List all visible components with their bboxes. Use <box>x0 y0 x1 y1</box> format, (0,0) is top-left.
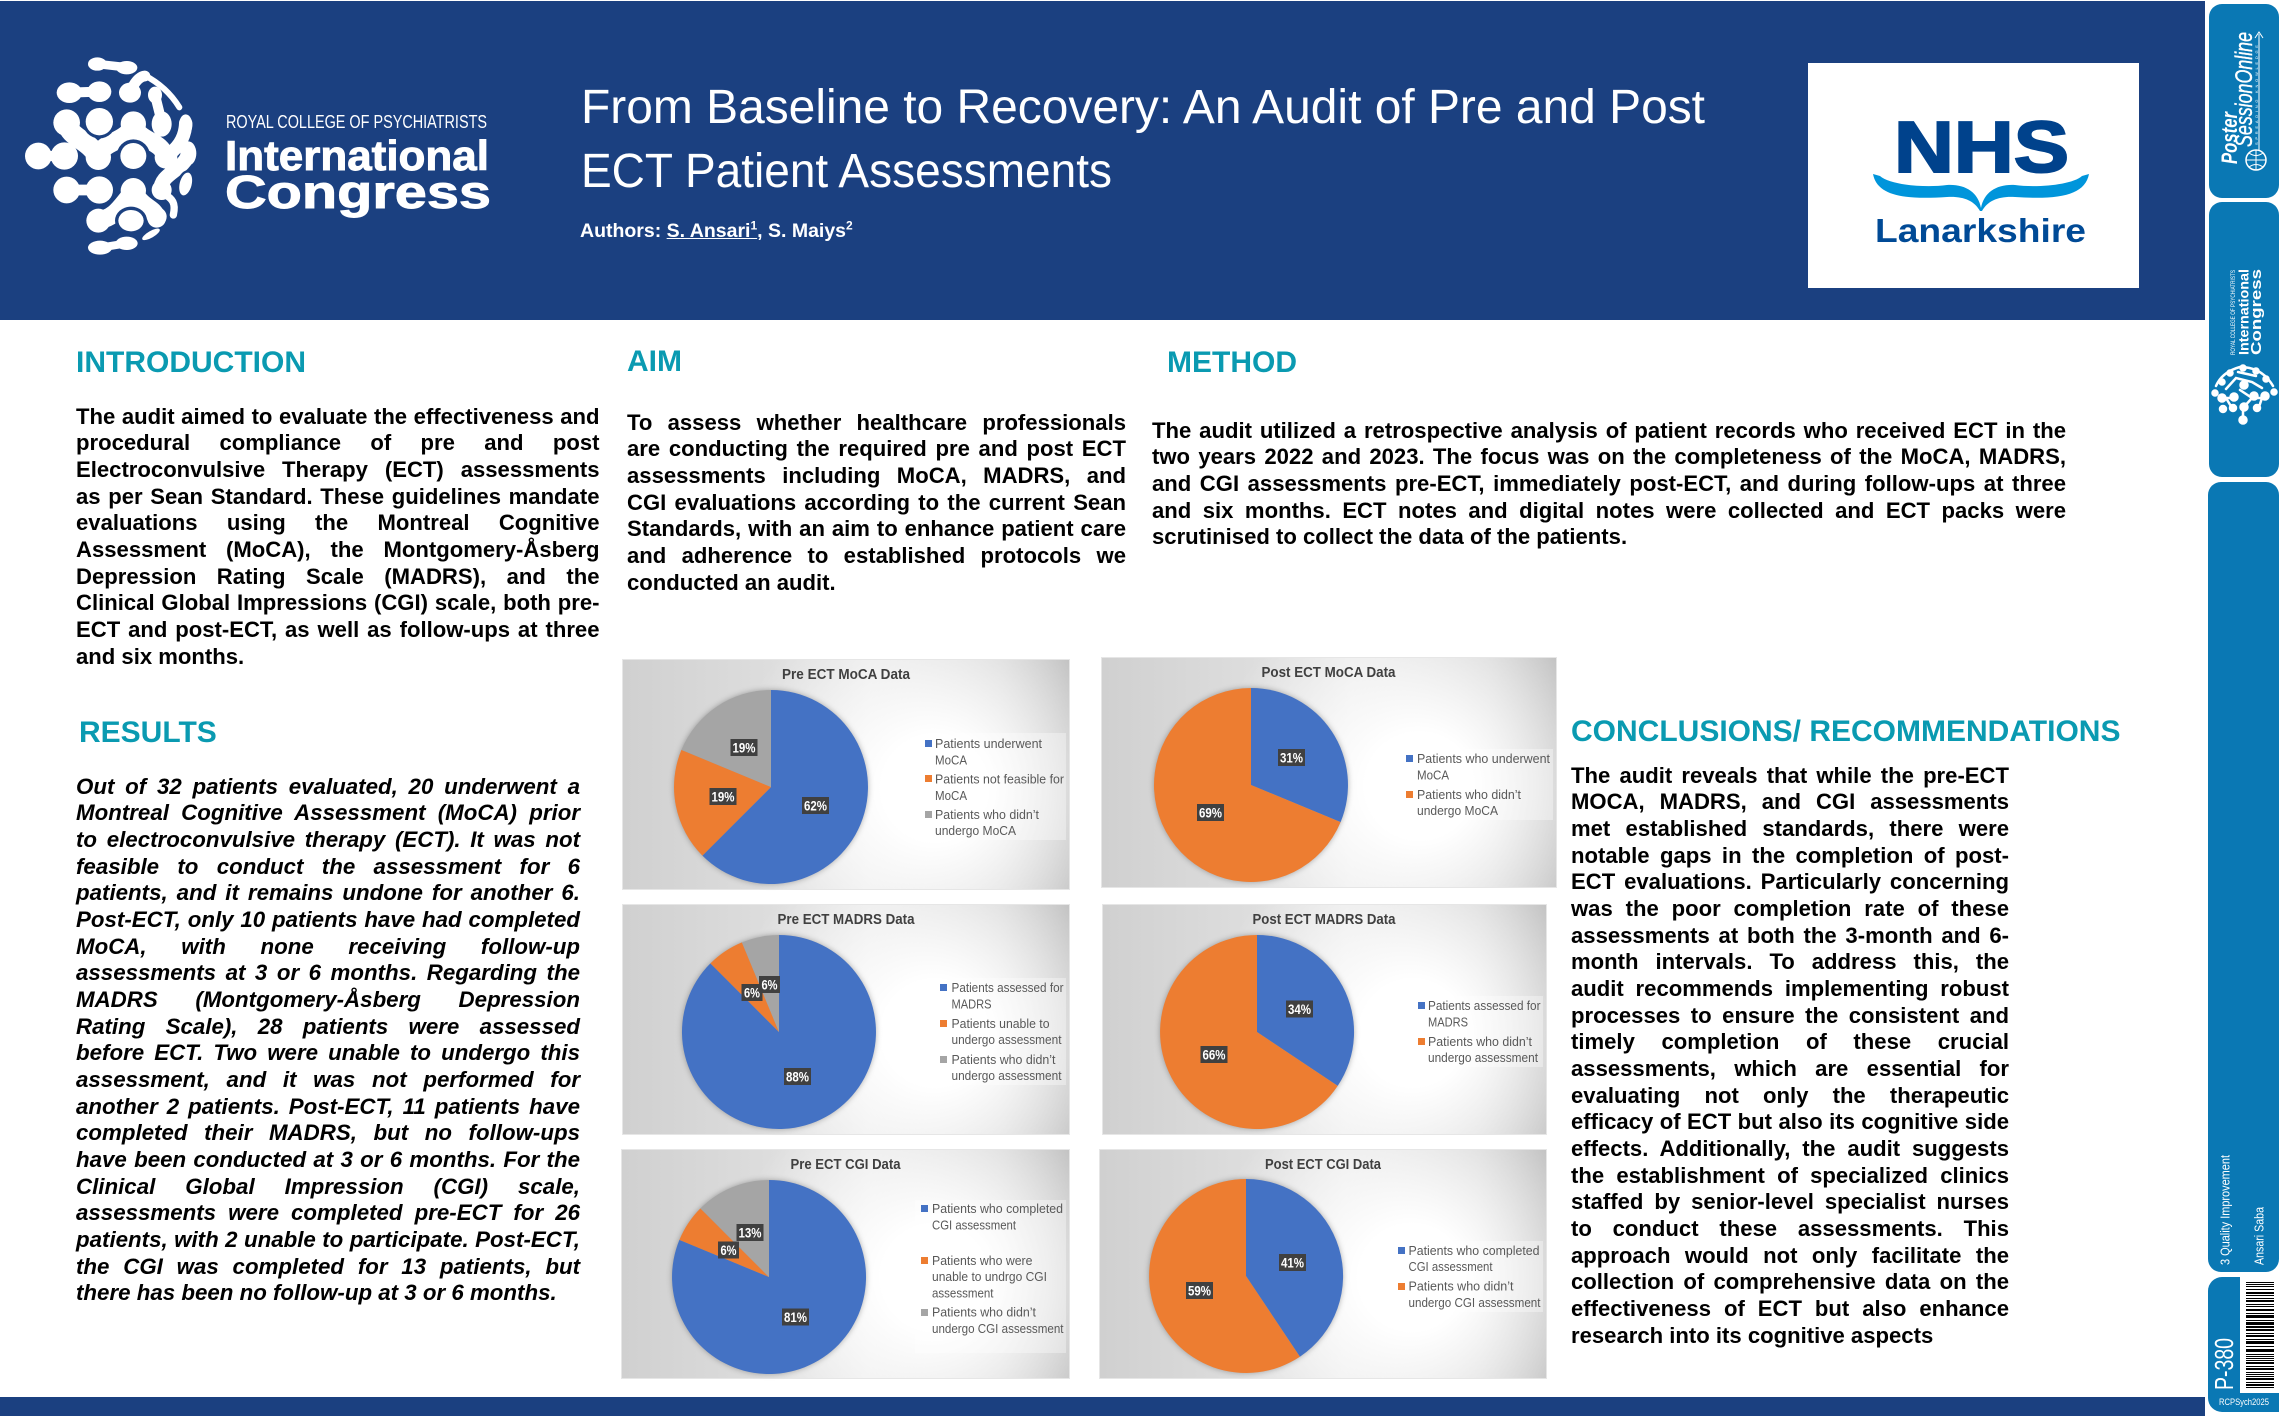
legend: Patients who underwent <box>1417 751 1550 766</box>
legend: Patients who completed <box>932 1201 1063 1216</box>
text block: conclusions: staffed by senior-level specialist nurses <box>1571 1189 2009 1214</box>
pie <box>1160 935 1354 1129</box>
title: ECT Patient Assessments <box>581 145 1112 198</box>
text block: aim: conducted an audit. <box>627 570 836 595</box>
legend: Patients who didn’t <box>935 807 1039 822</box>
text block: conclusions: collection of comprehensive data on the <box>1571 1269 2009 1294</box>
text block: aim <box>627 410 1126 595</box>
legend: undergo assessment <box>952 1068 1062 1083</box>
text block: introduction: Assessment (MoCA), the Montgomery-Åsberg <box>76 537 600 562</box>
data labels: 6% <box>762 978 778 992</box>
text block: conclusions: notable gaps in the completion of post- <box>1571 843 2009 868</box>
data labels: 88% <box>786 1070 809 1084</box>
legend: undergo CGI assessment <box>1408 1295 1541 1310</box>
legend: Patients assessed for <box>952 980 1064 995</box>
chart title: Pre ECT CGI Data <box>790 1157 901 1173</box>
text block: results: Post-ECT, only 10 patients have had completed <box>76 907 580 932</box>
text block: results: assessment, and it was not performed for <box>76 1067 580 1092</box>
text block: results: have been conducted at 3 or 6 months. For the <box>76 1147 580 1172</box>
title <box>581 81 1705 198</box>
sidebar tab: PosterSessionOnline <box>2209 4 2279 198</box>
text block: conclusions: effectiveness of ECT but also enhance <box>1571 1296 2009 1321</box>
header band <box>0 1 2205 320</box>
text block: results: assessments were completed pre-ECT for 26 <box>76 1200 580 1225</box>
heading: results: RESULTS <box>79 716 217 749</box>
sidebar tab: International Congress <box>2209 202 2279 477</box>
legend: unable to undrgo CGI <box>932 1269 1047 1284</box>
data labels: 13% <box>738 1226 762 1240</box>
legend: MoCA <box>935 752 967 768</box>
logo wordmark: International <box>225 132 489 179</box>
data labels <box>718 1224 809 1326</box>
chart title: Pre ECT MADRS Data <box>778 912 915 928</box>
legend: Patients who didn’t <box>1408 1278 1514 1294</box>
title: From Baseline to Recovery: An Audit of Pre and Post <box>581 81 1705 134</box>
chart title: Post ECT MoCA Data <box>1262 665 1396 681</box>
heading: method: METHOD <box>1167 346 1297 379</box>
legend: Patients unable to <box>952 1016 1050 1031</box>
text block: introduction: and six months. <box>76 644 244 669</box>
text block: conclusions: MOCA, MADRS, and CGI assessments <box>1571 789 2009 814</box>
footer band <box>0 1397 2205 1416</box>
panel: Post ECT MoCA chart <box>1101 657 1557 888</box>
text block: results: patients, with 2 unable to participate. Post-ECT, <box>76 1227 580 1252</box>
text block: aim: and adherence to established protocols we <box>627 543 1126 568</box>
heading: introduction: INTRODUCTION <box>76 346 306 379</box>
legend: MADRS <box>1428 1014 1468 1030</box>
text block: conclusions: evaluating not only the therapeutic <box>1571 1083 2009 1108</box>
legend: undergo MoCA <box>935 823 1016 838</box>
text block: results: feasible to conduct the assessment for 6 <box>76 854 580 879</box>
text block: conclusions: was the poor completion rate of these <box>1571 896 2009 921</box>
text block: method <box>1152 418 2066 549</box>
text block: conclusions: ECT evaluations. Particularly concerning <box>1571 869 2009 894</box>
sidebar <box>2208 4 2279 1412</box>
text block: introduction: ECT and post-ECT, as well as follow-ups at three <box>76 617 600 642</box>
legend <box>1401 749 1553 820</box>
panel: Pre ECT MADRS chart <box>622 904 1070 1135</box>
text block: results: assessments at 3 or 6 months. Regarding the <box>76 960 580 985</box>
sidebar tab: PosterSessionOnline: Poster <box>2217 111 2242 164</box>
legend: Patients who were <box>932 1253 1032 1268</box>
data labels: 6% <box>720 1243 736 1258</box>
pie <box>1149 1179 1343 1373</box>
text block: results: another 2 patients. Post-ECT, 11 patients have <box>76 1094 580 1119</box>
text block: conclusions: efficacy of ECT but also its cognitive side <box>1571 1109 2009 1134</box>
legend: MoCA <box>1417 768 1449 782</box>
text block: conclusions: met established standards, there were <box>1571 816 2009 841</box>
icon: brain dots <box>2212 366 2276 424</box>
sidebar tab: poster number and barcode: RCPSych2025 <box>2219 1397 2269 1407</box>
text block: conclusions: month intervals. To address this, the <box>1571 949 2009 974</box>
text block: conclusions: The audit reveals that while the pre-ECT <box>1571 762 2009 788</box>
text block: results <box>76 774 582 1305</box>
logo: NHS Lanarkshire <box>1808 63 2139 288</box>
text block: method: and CGI assessments pre-ECT, immediately post-ECT, and during follow-ups at three <box>1152 471 2066 496</box>
data labels: 62% <box>804 798 827 814</box>
logo: NHS Lanarkshire: NHS <box>1894 108 2069 188</box>
legend <box>935 978 1066 1085</box>
logo wordmark: Congress <box>225 166 491 218</box>
legend: CGI assessment <box>1408 1259 1493 1274</box>
text block: results: Montreal Cognitive Assessment (MoCA) prior <box>76 800 580 825</box>
sidebar tab: International Congress: ROYAL COLLEGE OF PSYCHIATRISTS <box>2231 270 2237 355</box>
text block: aim: To assess whether healthcare professionals <box>627 410 1126 434</box>
legend <box>1412 996 1543 1067</box>
text block: conclusions: the establishment of specialized clinics <box>1571 1163 2009 1188</box>
text block: conclusions: audit recommends implementing robust <box>1571 976 2009 1001</box>
text block: introduction: Electroconvulsive Therapy (ECT) assessments <box>76 457 600 482</box>
panel: Pre ECT CGI chart <box>621 1149 1070 1379</box>
barcode <box>2246 1282 2274 1388</box>
legend: assessment <box>932 1286 994 1300</box>
text block: results: Out of 32 patients evaluated, 20 underwent a <box>76 774 580 798</box>
legend: Patients assessed for <box>1428 998 1541 1013</box>
authors: Authors: S. Ansari1, S. Maiys2 <box>580 218 853 242</box>
heading: aim: AIM <box>627 345 682 378</box>
sidebar tab: International Congress: International <box>2236 269 2252 355</box>
chart title: Post ECT CGI Data <box>1265 1157 1382 1173</box>
legend: Patients who didn’t <box>952 1052 1056 1067</box>
text block: conclusions: timely completion of these crucial <box>1571 1029 2009 1054</box>
text block: method: The audit utilized a retrospective analysis of patient records who received ECT in the <box>1152 418 2066 442</box>
sidebar tab: PosterSessionOnline: SPREADING KNOWLEDGE <box>2254 45 2259 145</box>
pie <box>1154 688 1348 882</box>
text block: conclusions: assessments at both the 3-month and 6- <box>1571 923 2009 948</box>
text block: results: before ECT. Two were unable to undergo this <box>76 1040 580 1065</box>
text block: results: Rating Scale), 28 patients were assessed <box>76 1014 580 1039</box>
data labels <box>1200 1000 1313 1063</box>
text block: conclusions: approach would not only facilitate the <box>1571 1243 2009 1268</box>
text block: method: scrutinised to collect the data of the patients. <box>1152 524 1627 549</box>
text block: results: Clinical Global Impression (CGI) scale, <box>76 1174 580 1199</box>
data labels: 41% <box>1281 1256 1304 1270</box>
data labels <box>710 739 829 814</box>
data labels: 69% <box>1199 806 1222 820</box>
panel: Post ECT CGI chart <box>1099 1149 1547 1379</box>
pie <box>674 690 868 884</box>
text block: results: MADRS (Montgomery-Åsberg Depression <box>76 987 580 1012</box>
text block: conclusions: effects. Additionally, the audit suggests <box>1571 1136 2009 1161</box>
data labels: 19% <box>712 790 734 804</box>
text block: introduction <box>76 404 600 669</box>
sidebar tab: poster number and barcode <box>2208 1277 2279 1412</box>
text block: introduction: as per Sean Standard. These guidelines mandate <box>76 484 600 509</box>
text block: introduction: evaluations using the Montreal Cognitive <box>76 510 600 535</box>
pie <box>682 935 876 1129</box>
data labels: 81% <box>784 1310 807 1325</box>
text block: conclusions: processes to ensure the consistent and <box>1571 1003 2009 1028</box>
data labels: 6% <box>744 986 760 1000</box>
legend: Patients not feasible for <box>935 772 1065 786</box>
panel: Post ECT MADRS chart <box>1102 904 1547 1135</box>
legend: CGI assessment <box>932 1218 1016 1232</box>
logo: Royal College of Psychiatrists International Congress <box>25 57 491 255</box>
legend <box>1393 1241 1543 1312</box>
legend: undergo assessment <box>1428 1050 1538 1065</box>
legend: undergo CGI assessment <box>932 1321 1064 1336</box>
legend <box>915 1200 1066 1353</box>
data labels: 31% <box>1280 750 1303 766</box>
legend: MoCA <box>935 788 967 803</box>
panel: Pre ECT MoCA chart <box>622 659 1070 890</box>
text block: introduction: Depression Rating Scale (MADRS), and the <box>76 564 600 589</box>
legend: undergo MoCA <box>1417 803 1498 818</box>
legend <box>918 733 1066 840</box>
legend: undergo assessment <box>952 1032 1062 1047</box>
data labels: 34% <box>1288 1002 1311 1017</box>
text block: aim: Standards, with an aim to enhance patient care <box>627 516 1126 541</box>
text block: results: MoCA, with none receiving follow-up <box>76 934 580 959</box>
text block: results: completed their MADRS, but no follow-ups <box>76 1120 580 1145</box>
sidebar tab: session and author: Ansari Saba <box>2252 1207 2266 1265</box>
sidebar tab: session and author <box>2208 482 2279 1272</box>
text block: results: the CGI was completed for 13 patients, but <box>76 1254 580 1279</box>
legend: Patients who didn’t <box>1417 787 1521 802</box>
text block: conclusions: research into its cognitive aspects <box>1571 1323 1933 1348</box>
data labels: 59% <box>1188 1284 1211 1298</box>
text block: method: two years 2022 and 2023. The focus was on the completeness of the MoCA, MADRS, <box>1152 444 2066 469</box>
text block: results: to electroconvulsive therapy (ECT). It was not <box>76 827 580 852</box>
text block: aim: are conducting the required pre and post ECT <box>627 436 1126 461</box>
legend: Patients who didn’t <box>1428 1034 1532 1049</box>
data labels <box>1197 749 1305 821</box>
sidebar tab: International Congress: Congress <box>2248 269 2265 355</box>
icon: congress globe <box>25 57 197 255</box>
text block: results: there has been no follow-up at 3 or 6 months. <box>76 1280 557 1305</box>
text block: introduction: Clinical Global Impressions (CGI) scale, both pre- <box>76 590 600 615</box>
text block: method: and six months. ECT notes and digital notes were collected and ECT packs were <box>1152 498 2066 523</box>
text block: aim: assessments including MoCA, MADRS, and <box>627 463 1126 488</box>
data labels <box>1186 1254 1306 1299</box>
logo wordmark <box>225 112 491 218</box>
text block: conclusions <box>1571 762 2009 1348</box>
data labels: 19% <box>732 740 756 756</box>
chart title: Pre ECT MoCA Data <box>782 667 911 683</box>
text block: introduction: procedural compliance of pre and post <box>76 430 600 455</box>
pie <box>672 1180 866 1374</box>
sidebar tab: session and author: 3 Quality Improvement <box>2218 1155 2232 1265</box>
legend: Patients underwent <box>935 736 1042 751</box>
chart title: Post ECT MADRS Data <box>1252 912 1396 928</box>
text block: conclusions: to conduct these assessments. This <box>1571 1216 2009 1241</box>
logo wordmark: ROYAL COLLEGE OF PSYCHIATRISTS <box>226 112 487 132</box>
legend: MADRS <box>952 996 992 1012</box>
sidebar tab: poster number and barcode: P-380 <box>2209 1338 2239 1390</box>
text block: introduction: The audit aimed to evaluate the effectiveness and <box>76 404 600 428</box>
legend: Patients who didn’t <box>932 1304 1036 1320</box>
text block: aim: CGI evaluations according to the current Sean <box>627 490 1126 515</box>
text block: conclusions: assessments, which are essential for <box>1571 1056 2009 1081</box>
text block: results: patients, and it remains undone for another 6. <box>76 880 580 905</box>
heading: conclusions: CONCLUSIONS/ RECOMMENDATIONS <box>1571 715 2120 748</box>
legend: Patients who completed <box>1408 1243 1540 1258</box>
data labels <box>742 976 811 1085</box>
data labels: 66% <box>1202 1048 1226 1062</box>
logo: NHS Lanarkshire: Lanarkshire <box>1875 212 2086 249</box>
